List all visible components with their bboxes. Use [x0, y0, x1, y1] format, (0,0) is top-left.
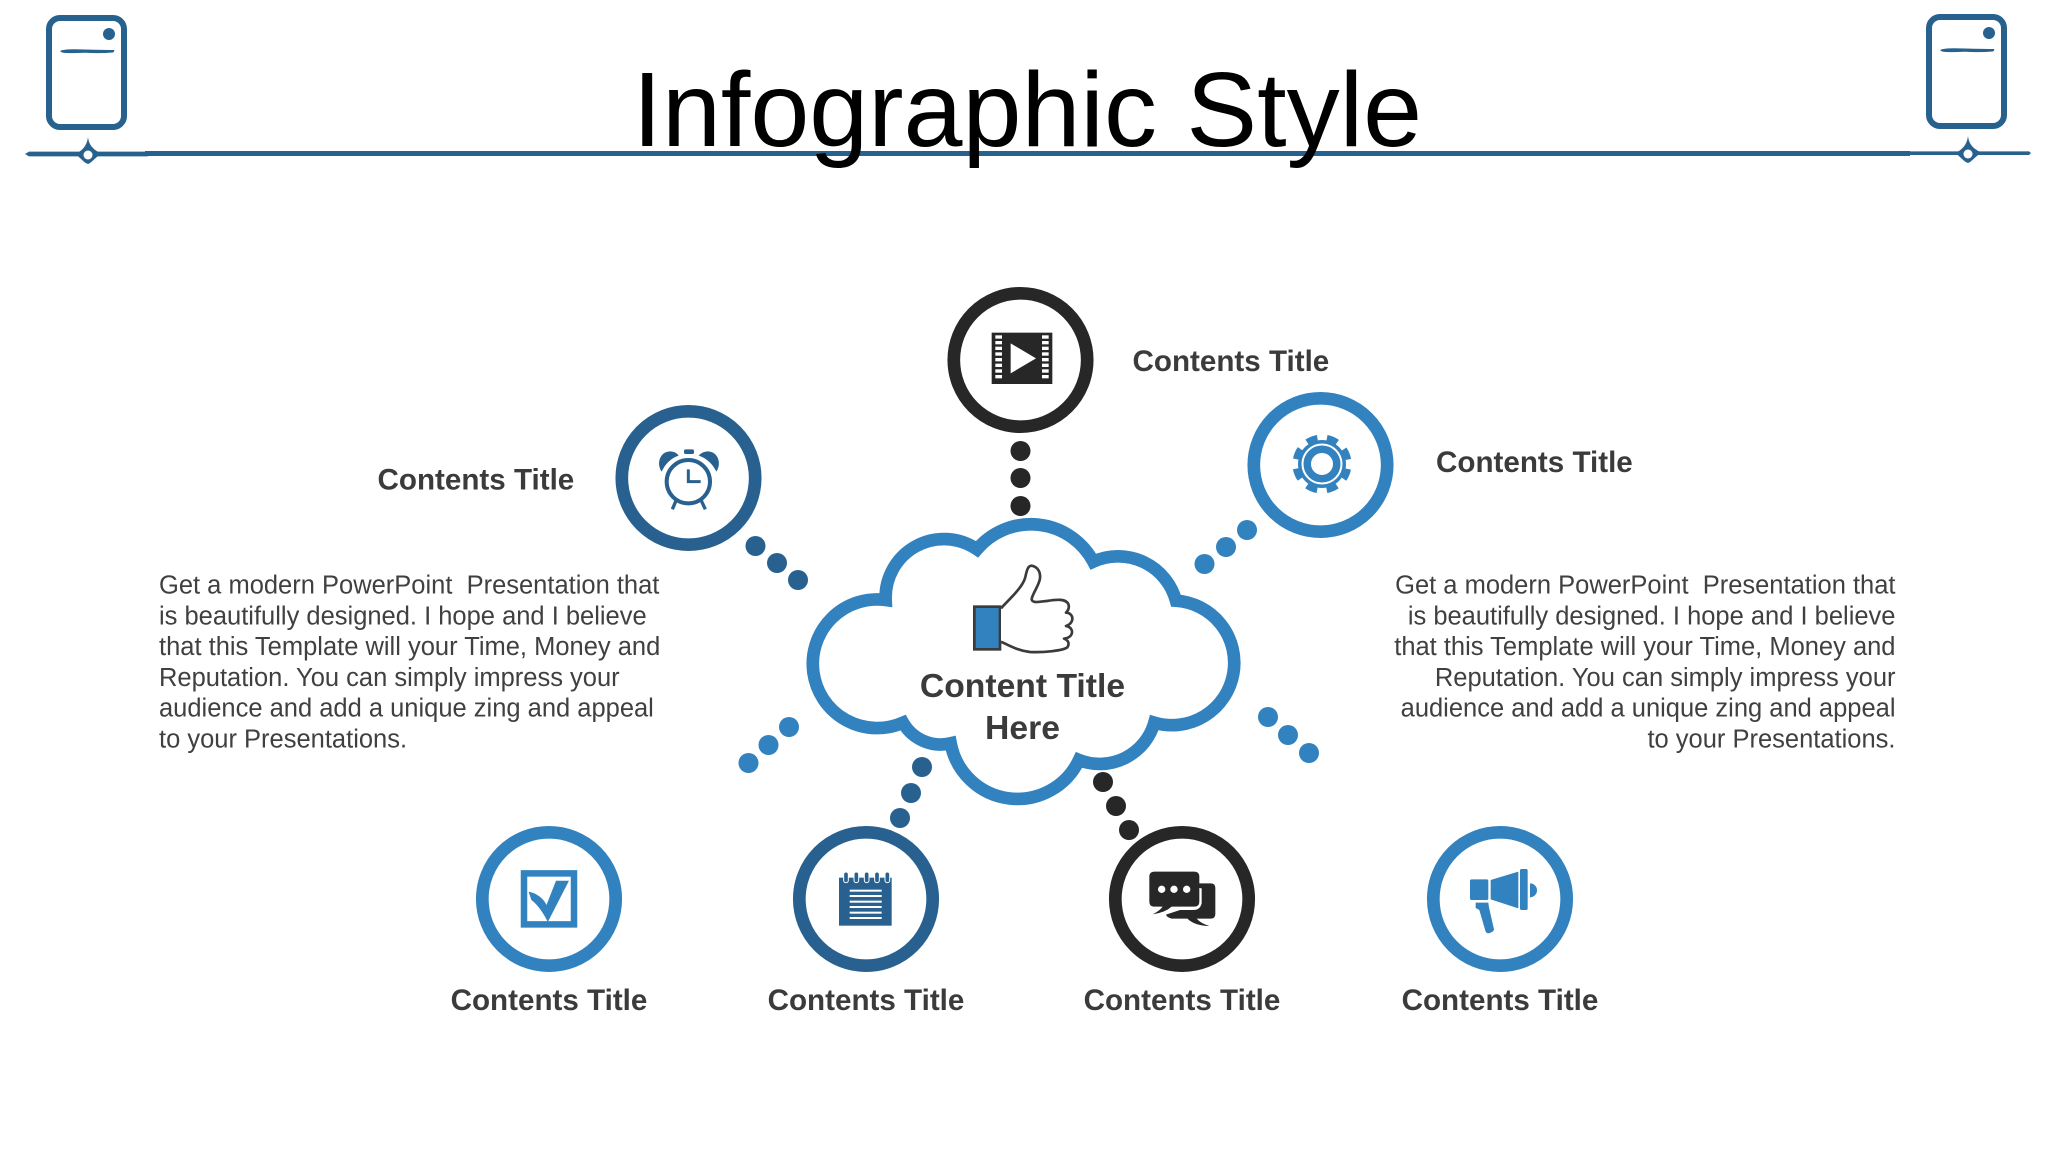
node: megaphone — [1433, 832, 1567, 966]
dots: to clock node — [746, 536, 808, 590]
text block: right: Get a modern PowerPoint Presentation that — [1395, 572, 1896, 600]
node: gear — [1254, 398, 1387, 532]
icon: megaphone — [1470, 869, 1537, 933]
label: chat: Contents Title — [1084, 984, 1280, 1017]
text block: left: that this Template will your Time, Money and — [159, 633, 660, 661]
label: megaphone: Contents Title — [1402, 984, 1598, 1017]
label: notepad: Contents Title — [768, 984, 964, 1017]
dots: to checkbox node — [738, 717, 799, 773]
text block: left: is beautifully designed. I hope and I believe — [159, 602, 647, 630]
central cloud — [813, 524, 1234, 799]
node: chat — [1115, 832, 1249, 966]
dots: to video node — [1010, 441, 1030, 516]
text block: right: audience and add a unique zing and appeal — [1401, 695, 1896, 723]
header rule — [25, 151, 2031, 156]
cloud heading: Content Title — [920, 667, 1125, 705]
icon: film play — [992, 333, 1052, 384]
text block: left: to your Presentations. — [159, 726, 407, 754]
icon: right device — [1929, 17, 2004, 163]
cloud heading: Here — [985, 709, 1060, 747]
icon: chat bubbles — [1149, 872, 1215, 926]
icon: thumbs up — [974, 566, 1072, 652]
label: checkbox: Contents Title — [451, 984, 647, 1017]
text block: right: is beautifully designed. I hope and I believe — [1408, 602, 1896, 630]
text block: left: audience and add a unique zing and appeal — [159, 695, 654, 723]
text block: right: that this Template will your Time, Money and — [1394, 633, 1896, 661]
node: clock — [622, 411, 755, 545]
text block: left: Reputation. You can simply impress your — [159, 664, 620, 692]
icon: alarm clock — [659, 449, 719, 509]
node: checkbox — [482, 832, 616, 966]
label: video: Contents Title — [1132, 345, 1329, 378]
text block: left: Get a modern PowerPoint Presentation that — [159, 572, 659, 600]
dots: to notepad node — [890, 757, 932, 828]
node: video — [954, 293, 1087, 427]
icon: notepad — [839, 872, 892, 926]
node: notepad — [799, 832, 933, 966]
dots: to gear node — [1194, 520, 1257, 574]
icon: gear — [1288, 430, 1356, 498]
text block: right: Reputation. You can simply impress your — [1435, 664, 1896, 692]
label: clock: Contents Title — [378, 464, 574, 496]
icon: checkbox — [524, 873, 574, 924]
dots: to megaphone node — [1258, 707, 1319, 763]
label: gear: Contents Title — [1436, 446, 1633, 479]
dots: to chat node — [1093, 772, 1139, 840]
title: Infographic Style — [632, 51, 1422, 169]
icon: left device — [49, 18, 124, 164]
text block: right: to your Presentations. — [1647, 726, 1896, 754]
